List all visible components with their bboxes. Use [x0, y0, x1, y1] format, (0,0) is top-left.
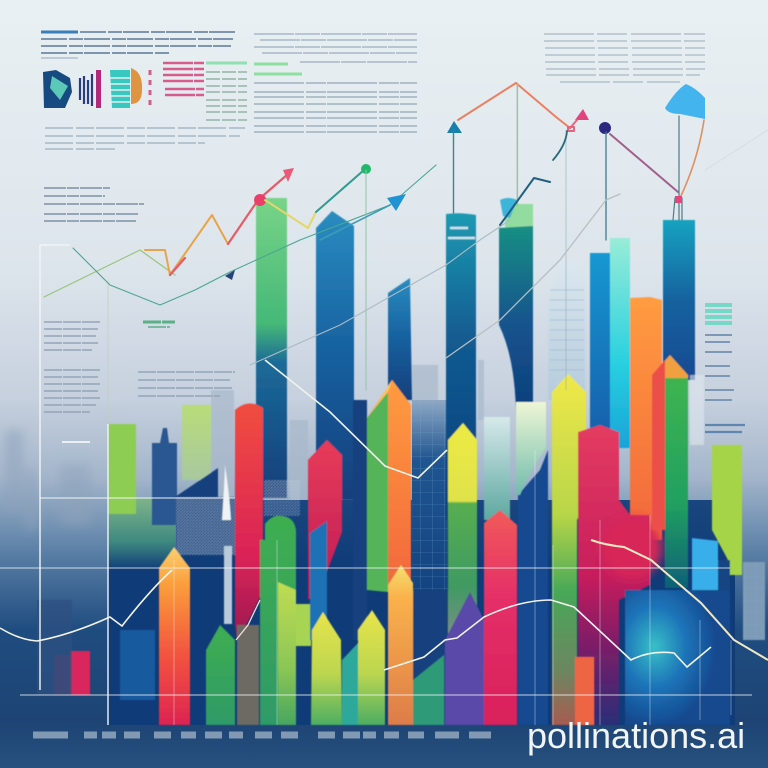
trend curve red segment	[236, 600, 260, 640]
grey spire	[224, 546, 232, 624]
bar: lime facet	[278, 582, 296, 725]
pale building right	[690, 375, 704, 445]
bar: teal navy	[446, 213, 476, 520]
trend curve middle	[265, 360, 447, 478]
bar: blue facet	[310, 521, 327, 640]
bar: mid blue	[388, 278, 412, 400]
bar: tall blue tower	[316, 211, 354, 500]
line: teal long	[73, 165, 436, 305]
icon: teal and navy emblem	[43, 70, 72, 108]
dark chart base block	[136, 500, 735, 725]
green hatched fade	[108, 498, 176, 570]
bar: yellow green	[448, 423, 477, 640]
bar: navy small right	[718, 560, 730, 680]
white spire	[222, 465, 231, 520]
bar: lime peak 1	[311, 612, 342, 725]
line: faint right	[705, 130, 768, 170]
bar: red house	[308, 440, 342, 600]
stem	[452, 130, 454, 213]
marker: purple dot	[599, 122, 611, 134]
trend curve bottom right	[384, 600, 711, 670]
bar: small lime	[296, 604, 311, 646]
line: yellow	[265, 200, 316, 228]
marker: pink knot	[568, 120, 577, 131]
trend curve thick right	[591, 540, 768, 660]
bar: lime left	[108, 424, 136, 514]
line: dark arrow	[500, 178, 550, 225]
right side teal stripes	[705, 305, 745, 432]
bar: green right	[665, 378, 688, 588]
skyscraper pale	[548, 262, 585, 400]
bar: teal low	[342, 643, 358, 725]
line: teal rising	[316, 170, 364, 212]
top right text column	[254, 34, 417, 62]
pale bar 1	[484, 417, 510, 520]
marker: green dot	[361, 164, 371, 174]
bar: green low	[206, 625, 235, 725]
hatched building	[176, 497, 236, 555]
label on teal bar	[448, 228, 475, 238]
arrow: red	[283, 168, 294, 182]
line: orange to red	[458, 83, 570, 128]
blue glass strip	[120, 630, 155, 700]
navy tall middle	[353, 400, 367, 640]
pink lines list	[150, 63, 204, 110]
bar: orange peak right	[652, 355, 688, 395]
line: long gray 2	[446, 194, 620, 358]
bar: dim red	[54, 655, 70, 695]
bar: orange red	[235, 403, 263, 640]
bar: navy right	[663, 220, 695, 380]
bar: red front	[484, 510, 517, 725]
blue lower mid	[411, 590, 448, 725]
marker: pink dot	[254, 194, 266, 206]
bar: teal	[610, 238, 630, 448]
purple stem	[605, 132, 607, 240]
building window grid	[743, 562, 765, 640]
lower left base	[108, 560, 138, 725]
bar: green cap	[505, 204, 533, 228]
line: long gray 1	[250, 220, 510, 365]
arrow: blue up	[447, 121, 462, 133]
bar: lime right	[712, 445, 742, 575]
icon: magenta bars	[80, 70, 101, 108]
icon: teal stripes and orange	[107, 68, 142, 108]
center text block	[254, 64, 417, 132]
bar: tall green	[256, 198, 287, 498]
bar: teal green	[499, 226, 533, 420]
bar: orange front	[159, 547, 190, 725]
building grid right	[743, 562, 765, 640]
glowing blue area	[625, 590, 730, 725]
bar: red right	[578, 425, 650, 725]
top left text block	[41, 32, 235, 58]
bar: green facet	[367, 392, 388, 592]
bar: navy left	[152, 428, 177, 525]
watermark: pollinations.ai	[527, 715, 745, 756]
bar: navy left low	[37, 600, 72, 695]
bar: orange tall	[630, 297, 662, 540]
bar: green tower	[260, 516, 296, 725]
arrow: pink	[575, 109, 589, 120]
bottom left text block	[45, 128, 245, 149]
bar: orange green peak	[367, 380, 411, 600]
blueprint grid overlay	[412, 400, 448, 590]
bar: pale lime	[182, 405, 211, 480]
faded skyline left	[5, 430, 90, 530]
bar: purple low	[445, 592, 484, 725]
bar: yellow tall	[552, 374, 586, 725]
curve: dark	[553, 131, 567, 160]
curve: pink	[680, 120, 704, 198]
line: red rising	[170, 174, 288, 275]
arrow: blue	[387, 194, 406, 211]
line chart left	[44, 164, 436, 390]
line chart right	[250, 83, 768, 365]
icon: blue blob	[500, 198, 517, 218]
green stem	[365, 170, 367, 390]
line: blue rising	[320, 205, 390, 240]
faded skyline middle	[211, 360, 484, 500]
hatch	[176, 497, 236, 555]
hatched building 2	[264, 480, 300, 516]
bar: blue	[590, 253, 610, 453]
small text blocks left	[44, 322, 235, 442]
skyscraper floors	[550, 290, 584, 370]
dark blue building	[518, 450, 548, 725]
bar: taupe	[237, 625, 259, 725]
upper right text block	[544, 34, 705, 82]
line: purple to pink	[610, 134, 678, 192]
trend curve bottom left	[0, 570, 172, 641]
lime stem	[516, 84, 518, 205]
bar: green low middle	[413, 655, 444, 725]
stems	[673, 116, 682, 220]
icon: blue blob right	[665, 84, 705, 119]
bar: red small	[70, 651, 90, 695]
blueprint grid tower	[412, 400, 448, 640]
bar: red strip	[652, 360, 665, 530]
bar: red circle	[602, 518, 662, 578]
pale bar 2	[516, 402, 546, 495]
green text list	[206, 63, 247, 120]
x axis labels	[33, 732, 491, 738]
bar: lime peak 2	[358, 610, 385, 725]
marker: pink	[675, 196, 682, 203]
tall back bars	[37, 198, 765, 725]
line: orange peak	[145, 215, 228, 275]
left middle text block	[44, 188, 144, 221]
arrow: blue small	[225, 270, 235, 280]
line: green thin left	[44, 250, 175, 297]
bar: light blue	[692, 538, 718, 640]
bar: orange lower right	[388, 380, 411, 590]
bar: orange yellow peak	[388, 565, 413, 725]
building silhouette	[175, 468, 218, 497]
bar: orange accent	[575, 657, 594, 725]
